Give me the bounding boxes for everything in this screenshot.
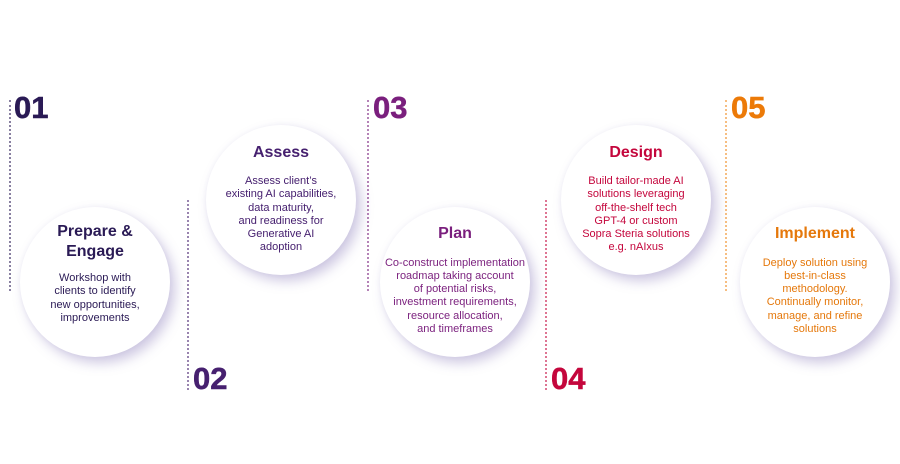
- text: Plan description: and timeframes: [417, 323, 493, 335]
- text: Assess description: Generative AI: [248, 228, 314, 240]
- text: Design description: solutions leveraging: [587, 188, 685, 200]
- text: Design description: Build tailor-made AI: [588, 175, 684, 187]
- divider: step 1: [9, 100, 11, 291]
- number: 03: 03: [373, 90, 407, 125]
- divider: step 5: [725, 100, 727, 291]
- heading: Prepare & Engage: Prepare &: [57, 223, 133, 240]
- text: Implement description: Deploy solution using: [763, 256, 867, 268]
- text: Assess description: [226, 175, 336, 253]
- panel: Implement: [740, 207, 890, 357]
- text: Assess description: adoption: [260, 241, 302, 253]
- heading: Plan: Plan: [438, 225, 472, 242]
- text: Design description: GPT-4 or custom: [594, 215, 678, 227]
- text: Assess description: existing AI capabilities,: [226, 188, 336, 200]
- text: Prepare & Engage description: [50, 272, 140, 324]
- panel: Prepare & Engage: [20, 207, 170, 357]
- text: Plan description: roadmap taking account: [396, 270, 514, 282]
- text: Plan description: [385, 256, 525, 335]
- text: Design description: e.g. nAIxus: [608, 241, 664, 253]
- text: Assess description: data maturity,: [248, 202, 314, 214]
- text: Implement description: best-in-class: [784, 270, 846, 282]
- text: Prepare & Engage description: improvements: [60, 312, 130, 324]
- panel: Design: [561, 125, 711, 275]
- divider: step 4: [545, 200, 547, 390]
- text: Implement description: manage, and refine: [768, 310, 862, 322]
- number: 01: 01: [14, 90, 48, 125]
- text: Implement description: solutions: [793, 323, 837, 335]
- text: Assess description: and readiness for: [238, 215, 324, 227]
- divider: step 2: [187, 200, 189, 390]
- heading: Prepare & Engage: Engage: [66, 243, 124, 260]
- text: Implement description: Continually monitor,: [767, 296, 863, 308]
- text: Implement description: [763, 256, 867, 335]
- text: Plan description: resource allocation,: [407, 310, 503, 322]
- divider: step 3: [367, 100, 369, 291]
- number: 05: 05: [731, 90, 765, 125]
- number: 04: 04: [551, 361, 585, 396]
- number: 02: 02: [193, 361, 227, 396]
- text: Plan description: of potential risks,: [414, 283, 496, 295]
- text: Design description: Sopra Steria solutions: [582, 228, 690, 240]
- text: Prepare & Engage description: Workshop with: [59, 272, 131, 284]
- heading: Prepare & Engage: [57, 223, 133, 260]
- heading: Design: Design: [609, 144, 663, 161]
- panel: Plan: [380, 207, 530, 357]
- text: Prepare & Engage description: clients to identify: [54, 285, 136, 297]
- text: Prepare & Engage description: new opportunities,: [50, 299, 140, 311]
- text: Assess description: Assess client’s: [245, 175, 317, 187]
- text: Design description: [582, 175, 690, 253]
- text: Design description: off-the-shelf tech: [595, 202, 677, 214]
- heading: Implement: Implement: [775, 225, 855, 242]
- heading: Assess: Assess: [253, 144, 309, 161]
- panel: Assess: [206, 125, 356, 275]
- text: Plan description: investment requirements,: [393, 296, 517, 308]
- text: Plan description: Co-construct implementation: [385, 256, 525, 268]
- text: Implement description: methodology.: [782, 283, 848, 295]
